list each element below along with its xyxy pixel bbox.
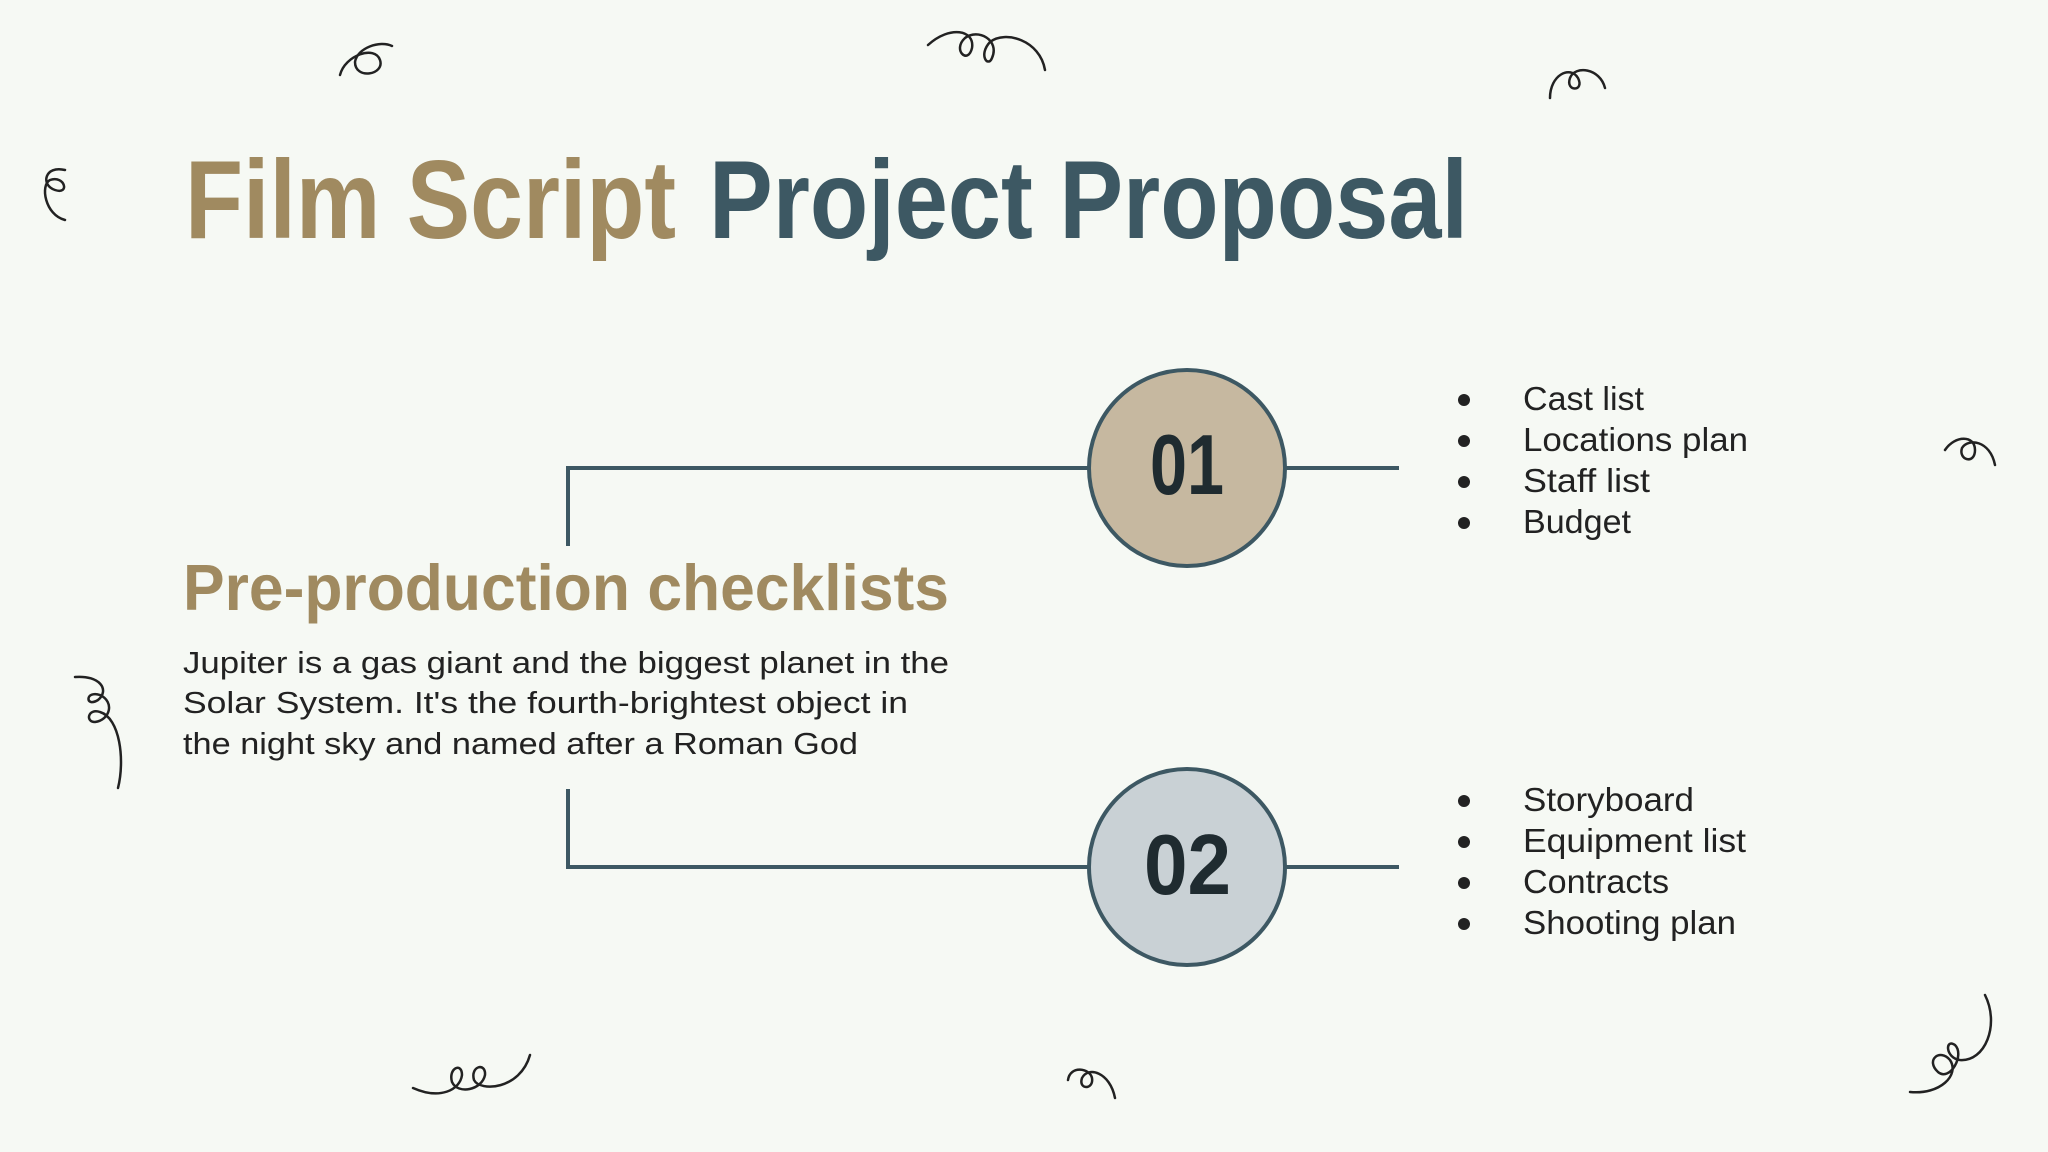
circle 01: [1089, 370, 1285, 566]
list 2: Equipment list: [1523, 822, 1746, 859]
circle 01: 01: [1150, 418, 1224, 513]
paragraph: Jupiter is a gas giant and the biggest planet in the: [183, 645, 949, 680]
circle 02: 02: [1144, 818, 1231, 913]
connector lines: [568, 468, 1399, 867]
list 2: Shooting plan: [1523, 904, 1736, 941]
title: Project Proposal: [709, 138, 1468, 262]
paragraph: the night sky and named after a Roman God: [183, 726, 858, 761]
paragraph: Solar System. It's the fourth-brightest object in: [183, 685, 908, 720]
list 1: Staff list: [1523, 462, 1650, 499]
circle 02: [1089, 769, 1285, 965]
list 1: [1458, 380, 1748, 540]
list 2: Contracts: [1523, 863, 1669, 900]
title: [185, 138, 1468, 262]
list 2: Storyboard: [1523, 781, 1694, 818]
list 1: Cast list: [1523, 380, 1644, 417]
paragraph: [183, 645, 949, 761]
list 2: [1458, 781, 1746, 941]
subheading: Pre-production checklists: [183, 551, 949, 624]
list 1: Locations plan: [1523, 421, 1748, 458]
title: Film Script: [185, 138, 676, 262]
list 1: Budget: [1523, 503, 1631, 540]
